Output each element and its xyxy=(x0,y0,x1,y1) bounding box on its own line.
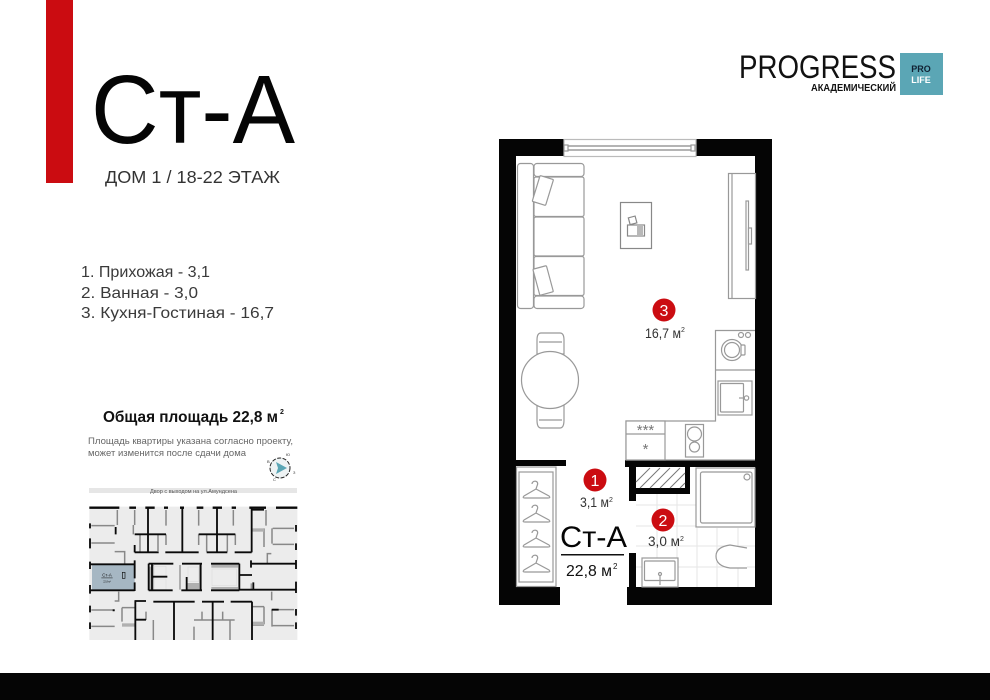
icon: compass: З xyxy=(293,470,296,475)
shaft hatching xyxy=(636,468,685,488)
room marker 2 xyxy=(648,508,684,549)
logo: PRO xyxy=(911,64,931,74)
room list: 3. Кухня-Гостиная - 16,7 xyxy=(81,305,274,322)
highlighted apartment xyxy=(92,564,135,591)
stove: *** xyxy=(637,422,654,439)
apartment label: 2 xyxy=(613,562,618,571)
logo: АКАДЕМИЧЕСКИЙ xyxy=(811,81,896,94)
kitchen sink xyxy=(718,381,752,415)
highlighted apartment: 22,8 м² xyxy=(103,580,111,583)
walls xyxy=(499,139,772,605)
bottom bar xyxy=(0,673,990,700)
toilet xyxy=(716,545,747,568)
room list xyxy=(81,264,274,322)
shower xyxy=(696,468,755,527)
stove: * xyxy=(643,441,649,458)
window xyxy=(564,140,696,156)
room marker 1: 1 xyxy=(591,473,600,490)
courtyard label strip: Двор с выходом на ул.Амундсена xyxy=(150,489,237,495)
kitchen counter xyxy=(626,330,755,460)
wardrobe with hangers xyxy=(516,467,556,586)
coffee table with laptop xyxy=(620,202,652,248)
bathroom sink xyxy=(642,558,678,587)
subtitle: building and floors: ДОМ 1 / 18-22 ЭТАЖ xyxy=(105,167,280,187)
room marker 1: 3,1 м xyxy=(580,495,609,510)
apartment label: 22,8 м xyxy=(566,563,612,580)
washing machine xyxy=(722,332,750,360)
logo: LIFE xyxy=(911,75,931,85)
room marker 3: 2 xyxy=(681,327,685,334)
courtyard label strip xyxy=(89,488,297,495)
stove xyxy=(626,421,665,460)
sofa xyxy=(518,164,584,308)
room marker 2: 2 xyxy=(680,536,684,543)
room marker 1 xyxy=(580,468,613,510)
apartment label xyxy=(560,521,627,580)
icon: compass: Ю xyxy=(286,452,290,457)
total area heading: Общая площадь 22,8 м xyxy=(103,409,278,426)
room marker 3 xyxy=(645,298,685,341)
highlighted apartment: Ст-А xyxy=(102,572,112,577)
icon: compass: В xyxy=(267,459,270,464)
total area heading: 2 xyxy=(280,409,284,416)
icon: compass xyxy=(267,452,296,482)
icon: compass: С xyxy=(273,477,276,482)
room marker 3: 3 xyxy=(660,303,669,320)
media cabinet xyxy=(728,174,756,298)
bathroom floor tiles xyxy=(636,494,755,587)
room marker 2: 3,0 м xyxy=(648,534,680,549)
room marker 3: 16,7 м xyxy=(645,326,681,341)
hob xyxy=(686,424,704,457)
logo: PROGRESS xyxy=(739,49,896,85)
room list: 2. Ванная - 3,0 xyxy=(81,285,198,302)
room marker 2: 2 xyxy=(659,513,668,530)
title: Ст-А xyxy=(91,55,295,164)
dining table with chairs xyxy=(522,333,578,428)
area disclaimer: Площадь квартиры указана согласно проекту, xyxy=(88,436,293,447)
room marker 1: 2 xyxy=(609,497,613,504)
area disclaimer xyxy=(88,436,293,459)
floor key plan xyxy=(89,507,297,640)
apartment label: Ст-А xyxy=(560,521,627,554)
floor plan xyxy=(499,139,772,605)
logo xyxy=(739,49,943,95)
red accent bar xyxy=(46,0,73,183)
area disclaimer: может изменится после сдачи дома xyxy=(88,448,247,459)
room list: 1. Прихожая - 3,1 xyxy=(81,264,210,281)
